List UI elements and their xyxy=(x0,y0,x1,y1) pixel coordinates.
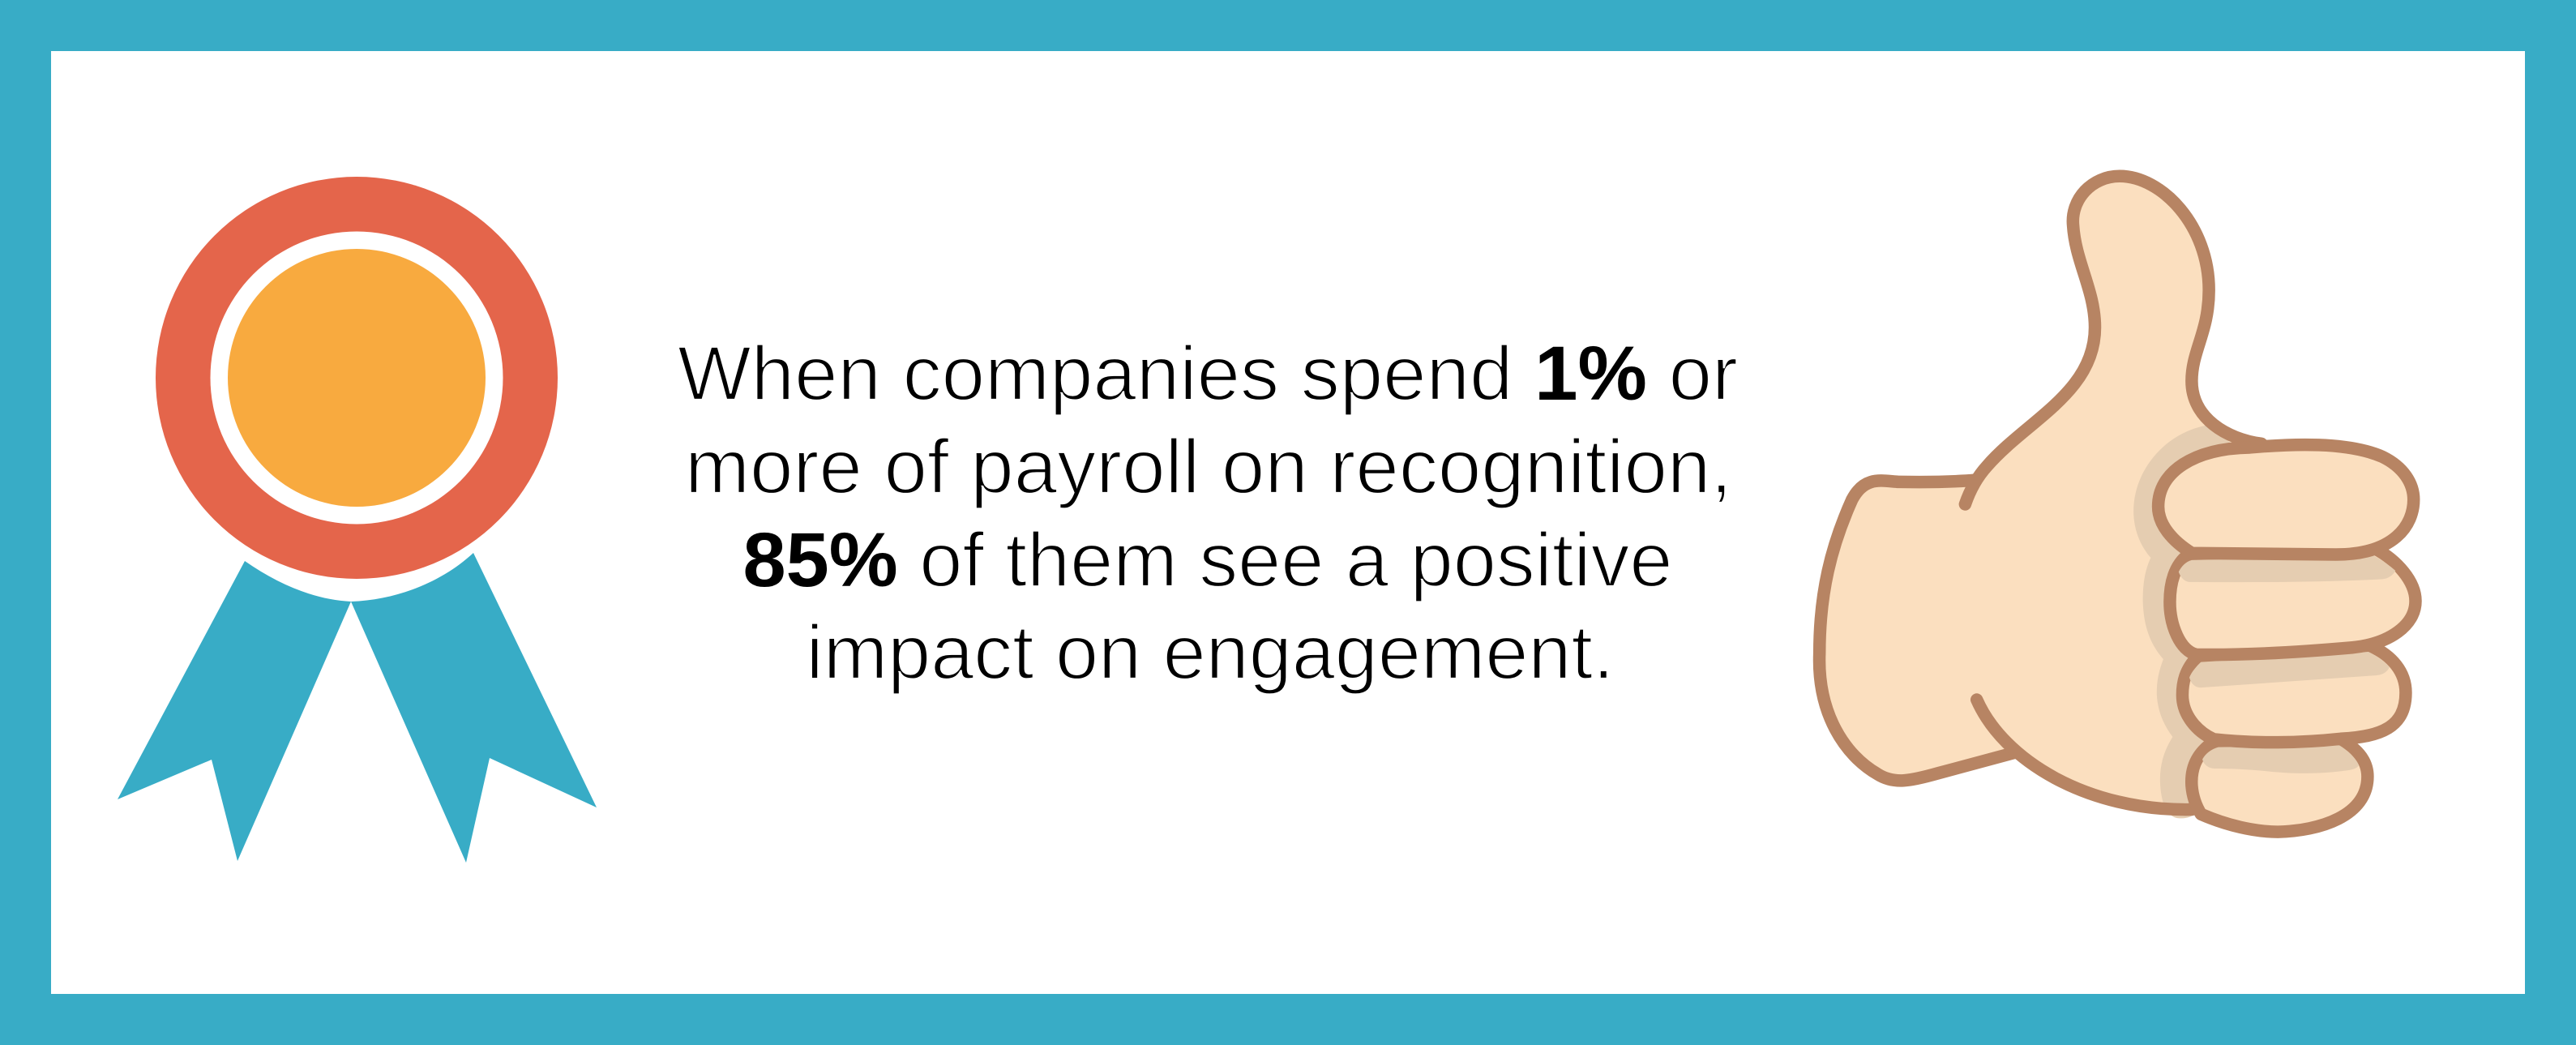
wrist and thumb outline xyxy=(1965,176,2261,504)
right ribbon tail xyxy=(351,553,597,863)
middle finger shadow xyxy=(2179,555,2395,582)
medal outer ring xyxy=(156,177,558,579)
palm and thumb fill xyxy=(1820,176,2278,810)
line 1: When companies spend 1% or xyxy=(678,331,1738,417)
left ribbon tail xyxy=(118,561,351,861)
palm lower crease xyxy=(1977,700,2192,810)
icon: thumbs up hand xyxy=(1820,176,2416,832)
line 4: impact on engagement. xyxy=(806,610,1615,696)
ring finger xyxy=(2182,646,2406,743)
palm shadow xyxy=(2133,425,2232,818)
line 2: more of payroll on recognition, xyxy=(685,424,1732,510)
medal white gap xyxy=(211,232,503,524)
line 3: 85% of them see a positive xyxy=(742,517,1673,603)
medal gold centre xyxy=(228,249,486,507)
little finger xyxy=(2192,739,2368,832)
middle finger xyxy=(2170,549,2416,655)
little finger shadow xyxy=(2202,745,2359,773)
icon: award ribbon badge xyxy=(118,177,597,863)
ring finger shadow xyxy=(2189,652,2390,687)
statistic text block xyxy=(678,331,1738,696)
index finger xyxy=(2159,445,2414,555)
wrist upper line xyxy=(1820,480,2013,781)
